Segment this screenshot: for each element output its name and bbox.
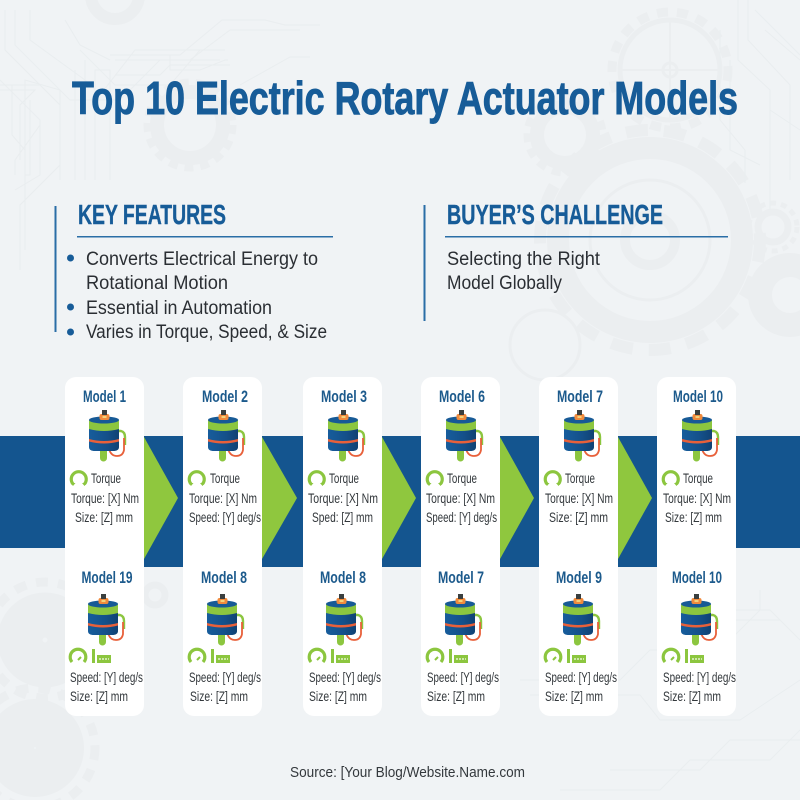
feature list	[67, 249, 327, 343]
model 7: Speed: [Y] deg/s	[427, 670, 499, 685]
feature list: Rotational Motion	[86, 273, 228, 294]
model 9: Size: [Z] mm	[545, 689, 603, 704]
model 9: Model 9	[556, 568, 602, 587]
model 10: Torque: [X] Nm	[663, 491, 731, 506]
model 6: Torque	[447, 471, 477, 486]
model 7: Size: [Z] mm	[427, 689, 485, 704]
model 3: Model 3	[321, 387, 367, 406]
card column 3	[303, 377, 382, 716]
model 19	[70, 568, 143, 704]
heading: key features: KEY FEATURES	[78, 199, 226, 230]
card column 5	[539, 377, 618, 716]
model 8: Size: [Z] mm	[309, 689, 367, 704]
model 19: Model 19	[82, 568, 132, 587]
model 10	[663, 568, 736, 704]
model 19: Size: [Z] mm	[70, 689, 128, 704]
challenge text: Selecting the Right	[447, 249, 601, 270]
feature list: Essential in Automation	[86, 298, 272, 319]
model 8: Model 8	[320, 568, 366, 587]
model 7: Torque	[565, 471, 595, 486]
model 8: Size: [Z] mm	[190, 689, 248, 704]
model 8: Model 8	[201, 568, 247, 587]
model 10	[662, 387, 731, 525]
model 7: Size: [Z] mm	[549, 510, 608, 525]
model 7	[427, 568, 499, 704]
challenge text	[447, 249, 601, 294]
model 1: Torque	[91, 471, 121, 486]
model 7: Model 7	[438, 568, 484, 587]
model 3	[308, 387, 378, 525]
feature list: Varies in Torque, Speed, & Size	[86, 322, 327, 343]
model 1	[70, 387, 139, 525]
panel: buyer's challenge	[424, 199, 728, 321]
arrows	[144, 437, 652, 559]
model 19: Speed: [Y] deg/s	[70, 670, 143, 685]
model 2: Model 2	[202, 387, 248, 406]
challenge text: Model Globally	[447, 273, 562, 294]
model 1: Torque: [X] Nm	[71, 491, 139, 506]
model 10: Torque	[683, 471, 713, 486]
model 2	[188, 387, 261, 525]
model 3: Sped: [Z] mm	[312, 510, 373, 525]
blue band	[0, 436, 800, 567]
model 2: Torque	[210, 471, 240, 486]
panel: key features	[54, 199, 333, 343]
model 1: Model 1	[83, 387, 126, 406]
card column 6	[657, 377, 736, 716]
model 9: Speed: [Y] deg/s	[545, 670, 617, 685]
model 7	[544, 387, 613, 525]
model 6	[426, 387, 497, 525]
model 8: Speed: [Y] deg/s	[309, 670, 381, 685]
model 10: Model 10	[673, 387, 723, 406]
model 6: Torque: [X] Nm	[426, 491, 495, 506]
model 8	[309, 568, 381, 704]
model 6: Speed: [Y] deg/s	[426, 510, 497, 525]
model 8	[189, 568, 261, 704]
card column 4	[421, 377, 500, 716]
card column 2	[183, 377, 262, 716]
feature list: Converts Electrical Energy to	[86, 249, 318, 270]
model 10: Model 10	[672, 568, 722, 587]
model 6: Model 6	[439, 387, 485, 406]
model 7: Torque: [X] Nm	[545, 491, 613, 506]
model 10: Size: [Z] mm	[663, 689, 721, 704]
model 3: Torque: [X] Nm	[308, 491, 378, 506]
heading: buyer's challenge: BUYER’S CHALLENGE	[447, 199, 663, 230]
model 9	[545, 568, 617, 704]
model 7: Model 7	[557, 387, 603, 406]
model 2: Speed: [Y] deg/s	[189, 510, 261, 525]
source note: Source: [Your Blog/Website.Name.com	[290, 764, 525, 781]
model 1: Size: [Z] mm	[75, 510, 133, 525]
model 8: Speed: [Y] deg/s	[189, 670, 261, 685]
card column 1	[65, 377, 144, 716]
model 10: Speed: [Y] deg/s	[663, 670, 736, 685]
model 10: Size: [Z] mm	[665, 510, 722, 525]
model 3: Torque	[329, 471, 359, 486]
model 2: Torque: [X] Nm	[189, 491, 257, 506]
